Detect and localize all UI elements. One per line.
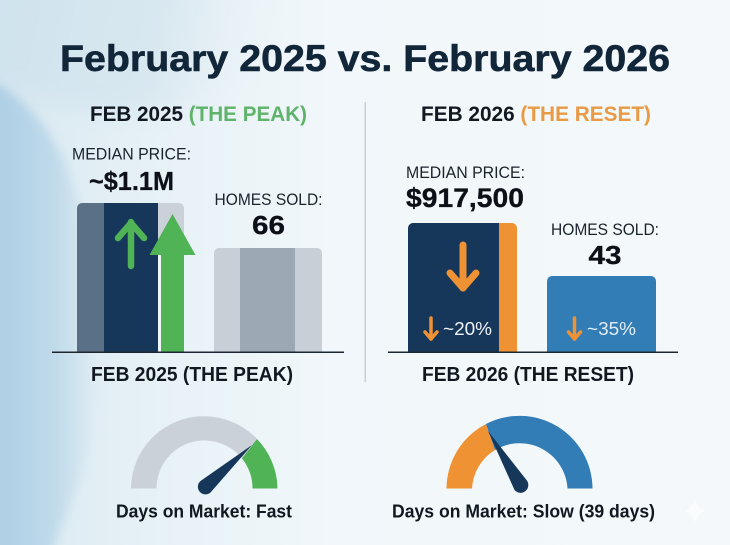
bar: median price 2025: [77, 203, 184, 352]
bar: homes sold 2026: [547, 276, 656, 352]
value: homes sold 2026: 43: [588, 240, 622, 270]
value: median price 2026: $917,500: [406, 183, 524, 213]
label: down 35 percent: ~35%: [587, 319, 636, 339]
gauge: slow: [446, 416, 592, 493]
heading: Feb 2025 the peak: FEB 2025 (THE PEAK): [90, 103, 307, 126]
gauge: fast: [131, 416, 278, 494]
label: median price 2026: MEDIAN PRICE:: [406, 163, 525, 182]
axis line 2025: [52, 352, 344, 353]
label: homes sold 2026: HOMES SOLD:: [551, 220, 659, 239]
icon: large up arrow: [150, 214, 196, 352]
panel: Feb 2026: [388, 103, 678, 386]
gauge needle: slow: [488, 431, 528, 493]
gauge needle: fast: [198, 445, 252, 494]
icon: large down arrow: [450, 245, 476, 288]
label: down 20 percent: [425, 318, 492, 339]
label: homes sold 2025: HOMES SOLD:: [214, 190, 322, 209]
label: median price 2025: MEDIAN PRICE:: [72, 144, 191, 164]
axis label 2025: FEB 2025 (THE PEAK): [91, 364, 293, 386]
heading: Feb 2026 the reset: FEB 2026 (THE RESET): [421, 103, 651, 126]
bar: homes sold 2025: [214, 248, 322, 352]
axis line 2026: [388, 352, 678, 353]
label: down 35 percent: [568, 318, 636, 339]
gauge caption: slow: Days on Market: Slow (39 days): [392, 500, 655, 522]
icon: sparkle watermark: [684, 499, 706, 523]
divider: [364, 102, 366, 382]
panel: Feb 2025: [52, 103, 344, 386]
gauge caption: fast: Days on Market: Fast: [116, 500, 292, 522]
value: median price 2025: ~$1.1M: [89, 166, 174, 196]
bar: median price 2026: [408, 223, 517, 352]
label: down 20 percent: ~20%: [443, 319, 492, 339]
icon: small up arrow: [118, 222, 144, 266]
title: February 2025 vs. February 2026: [60, 37, 670, 79]
axis label 2026: FEB 2026 (THE RESET): [422, 364, 634, 386]
value: homes sold 2025: 66: [252, 210, 285, 240]
